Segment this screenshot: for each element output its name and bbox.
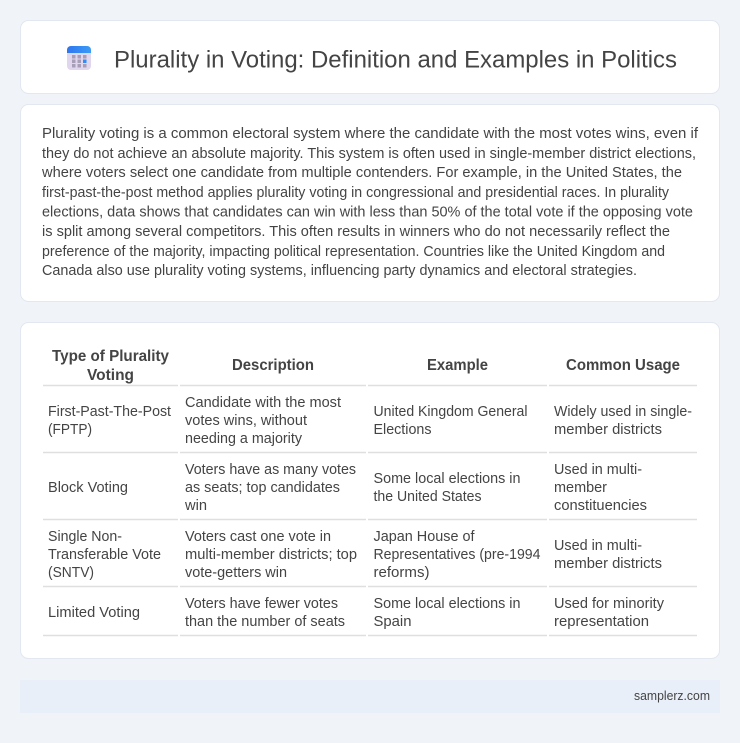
panel: intro paragraph [20, 104, 720, 302]
table row: FPTP: Elections [374, 422, 432, 438]
table header: Description [232, 357, 314, 374]
table row: SNTV: vote-getters win [185, 565, 287, 581]
table row: block voting: win [184, 498, 207, 514]
icon: calendar [67, 46, 91, 70]
table rules [43, 386, 697, 636]
text block: intro: where voters select one candidate from multiple contenders. For example, in the United States, the [41, 165, 682, 181]
table row: SNTV: Single Non- [48, 529, 122, 545]
text block: intro: Canada also use plurality voting systems, influencing party dynamics and electoral strategies. [42, 263, 637, 279]
table row: FPTP: (FPTP) [48, 422, 92, 438]
table row: block voting: constituencies [554, 498, 647, 514]
text block: intro: Plurality voting is a common electoral system where the candidate with the most votes wins, even if [42, 126, 699, 142]
table row: FPTP: needing a majority [185, 431, 303, 447]
table row: FPTP [48, 395, 692, 447]
table row: SNTV: (SNTV) [48, 565, 94, 581]
table header: Voting [87, 367, 134, 384]
table row: block voting: Voters have as many votes [185, 462, 356, 478]
text block: intro: elections, data shows that candidates can win with less than 50% of the total vote if the opposing vote [42, 204, 693, 220]
text block: intro [41, 126, 699, 279]
text block: intro: preference of the majority, impacting political representation. Countries like the United Kingdom and [42, 244, 665, 260]
table header: Type of Plurality [52, 348, 169, 365]
table header [52, 348, 680, 384]
panel: table [20, 322, 720, 658]
text block: intro: first-past-the-post method applies plurality voting in congressional and presidential races. In plurality [42, 185, 670, 201]
table row: limited voting: Some local elections in [374, 596, 520, 612]
table row: SNTV: reforms) [374, 565, 430, 581]
table row: block voting: Block Voting [48, 480, 128, 496]
title: Plurality in Voting: Definition and Examples in Politics [114, 46, 677, 74]
table row: block voting: as seats; top candidates [185, 480, 340, 496]
table row: limited voting: Spain [374, 614, 412, 630]
table row: limited voting: Voters have fewer votes [185, 596, 338, 612]
table row: limited voting: representation [554, 614, 649, 630]
table row: SNTV: Used in multi- [554, 538, 642, 554]
table row: SNTV: Voters cast one vote in [185, 529, 331, 545]
table row: block voting: the United States [374, 489, 482, 505]
table row: FPTP: United Kingdom General [374, 404, 528, 420]
table row: FPTP: First-Past-The-Post [48, 404, 171, 420]
table row: FPTP: Widely used in single- [554, 404, 692, 420]
footer bar [20, 680, 720, 713]
table row: limited voting [48, 596, 665, 630]
table row: FPTP: votes wins, without [185, 413, 307, 429]
table header: Common Usage [566, 357, 680, 374]
table row: SNTV: Transferable Vote [48, 547, 161, 563]
panel: title header [20, 20, 720, 94]
table row: limited voting: than the number of seats [185, 614, 345, 630]
table row: FPTP: member districts [554, 422, 662, 438]
table row: block voting: Used in multi- [554, 462, 642, 478]
table row: limited voting: Limited Voting [48, 605, 140, 621]
text block: intro: is split among several competitors. This often results in winners who do not necessarily reflect the [42, 224, 670, 240]
table row: block voting [48, 462, 647, 514]
table row: block voting: Some local elections in [374, 471, 520, 487]
table row: block voting: member [554, 480, 607, 496]
table row: FPTP: Candidate with the most [185, 395, 341, 411]
table row: SNTV: multi-member districts; top [185, 547, 357, 563]
table row: SNTV: Representatives (pre-1994 [374, 547, 540, 563]
text block: intro: they do not achieve an absolute majority. This system is often used in single-member district elections, [42, 146, 696, 162]
table row: SNTV: Japan House of [374, 529, 475, 545]
table header: Example [427, 357, 488, 374]
footer credit: samplerz.com [634, 689, 710, 703]
table row: SNTV: member districts [554, 556, 662, 572]
table row: limited voting: Used for minority [554, 596, 665, 612]
table row: SNTV [48, 529, 662, 581]
